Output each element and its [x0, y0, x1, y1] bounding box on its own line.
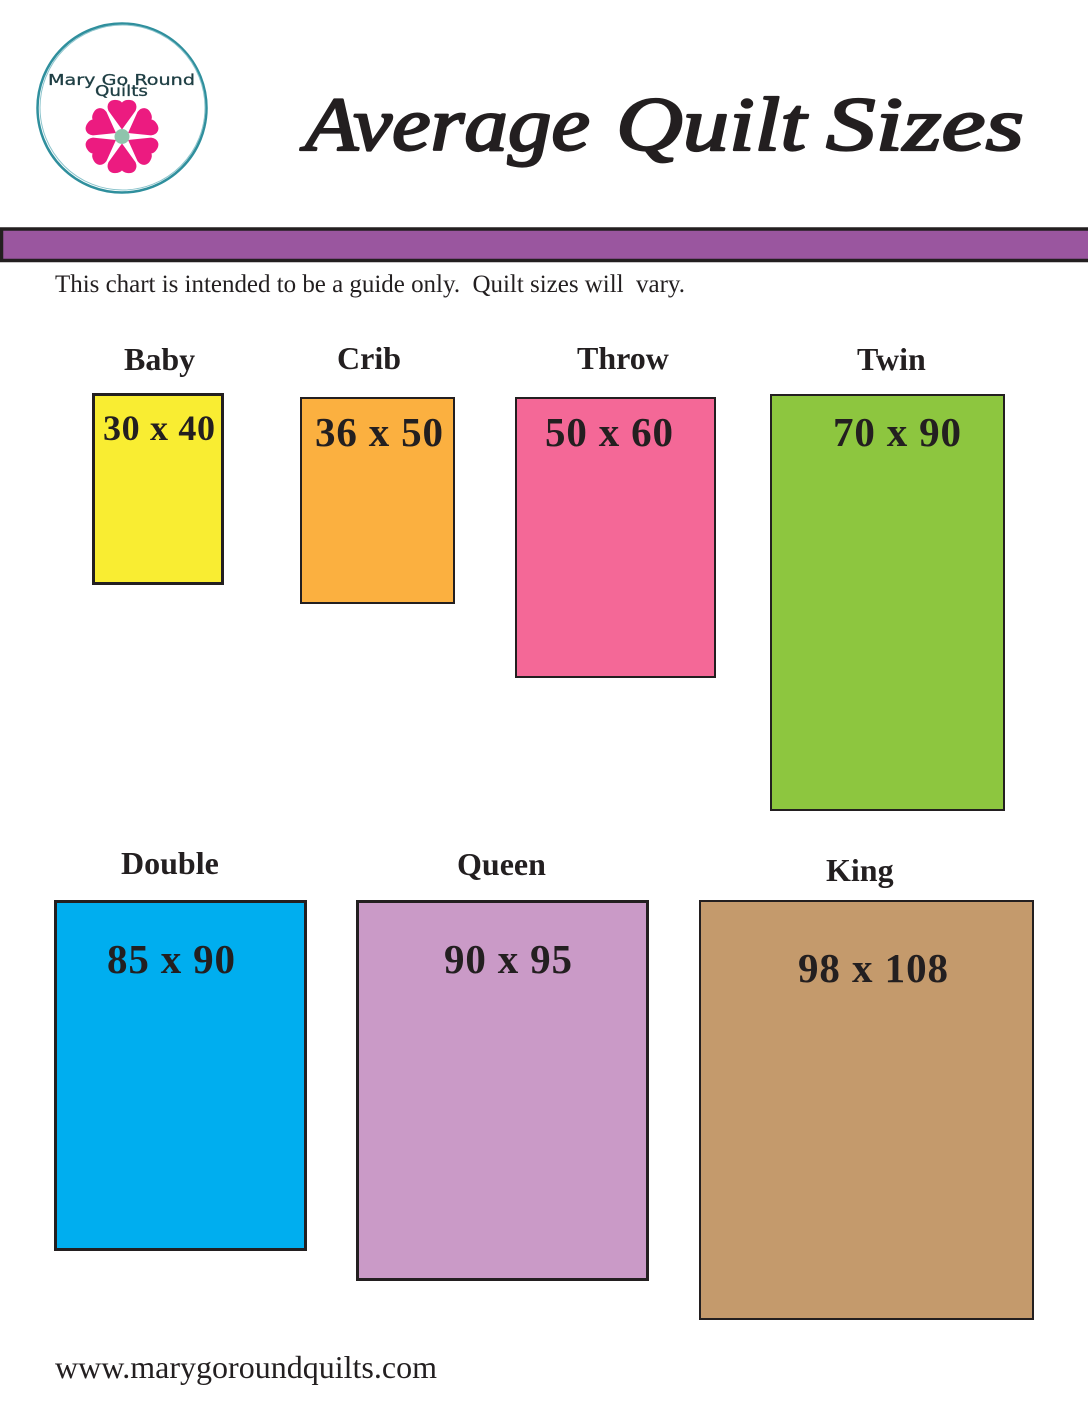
- purple header bar: [2, 229, 1088, 260]
- size: 90 x 95: 90 x 95: [444, 936, 572, 982]
- size: 50 x 60: 50 x 60: [545, 409, 673, 455]
- title: Sizes: [826, 83, 1024, 167]
- disclaimer note: This chart is intended to be a guide only. Quilt sizes will vary.: [55, 271, 685, 298]
- label: Twin: Twin: [857, 341, 926, 377]
- size: 85 x 90: 85 x 90: [107, 936, 235, 982]
- logo name: Mary Go Round: [48, 71, 195, 89]
- size: 36 x 50: 36 x 50: [315, 409, 443, 455]
- label: Double: Double: [121, 845, 219, 881]
- title: Average: [299, 83, 590, 167]
- label: King: King: [826, 852, 894, 888]
- quilt: Double: [56, 845, 306, 1250]
- title: Quilt: [616, 83, 808, 167]
- website URL: www.marygoroundquilts.com: [55, 1349, 437, 1385]
- size: 30 x 40: 30 x 40: [103, 408, 215, 448]
- size: 70 x 90: 70 x 90: [833, 409, 961, 455]
- rectangle: King: [700, 901, 1033, 1319]
- logo ring: [38, 24, 206, 192]
- label: Baby: Baby: [124, 341, 195, 377]
- logo name: [48, 71, 195, 100]
- size: 98 x 108: 98 x 108: [798, 945, 948, 991]
- rectangle: Throw: [516, 398, 715, 677]
- rectangle: Crib: [301, 398, 454, 603]
- rectangle: Twin: [771, 395, 1004, 810]
- logo: [38, 24, 206, 192]
- label: Throw: Throw: [577, 340, 669, 376]
- quilt: Twin: [771, 341, 1004, 810]
- title: [299, 83, 1024, 167]
- rectangle: Baby: [94, 394, 222, 584]
- logo name: Quilts: [95, 82, 148, 100]
- quilt: Queen: [358, 846, 648, 1280]
- quilt: Crib: [301, 340, 454, 603]
- icon: heart flower: [84, 100, 160, 172]
- quilt: King: [700, 852, 1033, 1319]
- label: Queen: Queen: [457, 846, 546, 882]
- quilt: Baby: [94, 341, 222, 584]
- quilt: Throw: [516, 340, 715, 677]
- rectangle: Double: [56, 902, 306, 1250]
- label: Crib: Crib: [337, 340, 401, 376]
- rectangle: Queen: [358, 902, 648, 1280]
